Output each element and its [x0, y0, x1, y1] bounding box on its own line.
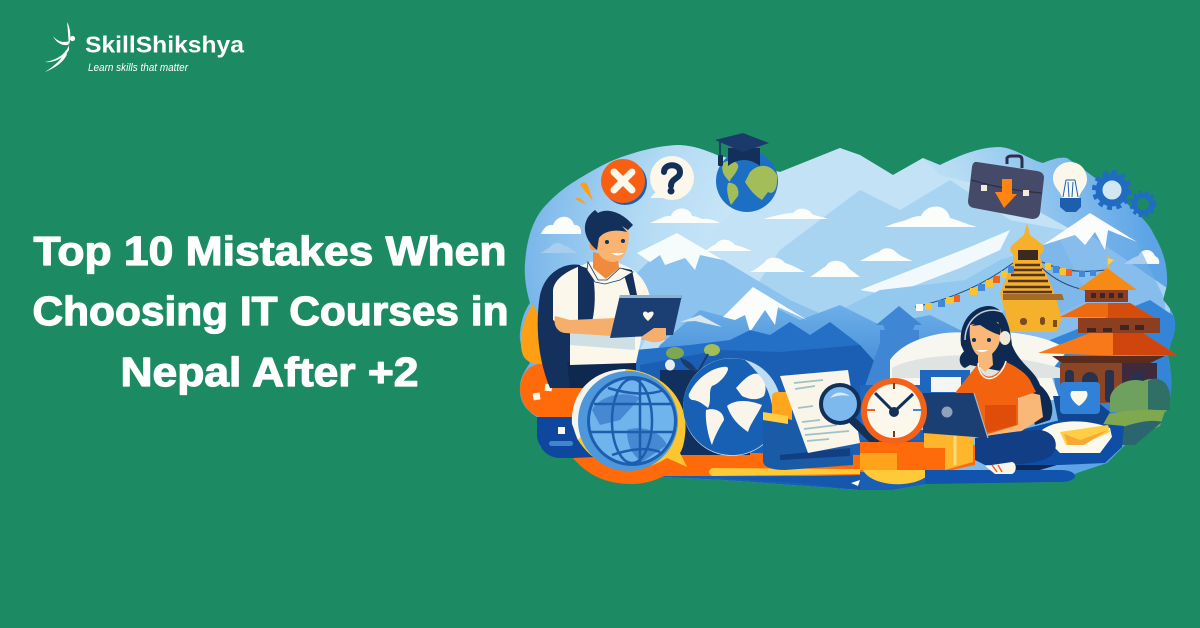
yurt dome — [890, 332, 1068, 400]
dark block behind world globe — [660, 370, 750, 455]
stupa — [1000, 223, 1064, 332]
globe in speech bubble — [572, 369, 687, 471]
headband — [965, 310, 1002, 340]
scenery inside blob — [515, 140, 1185, 495]
paper — [780, 370, 860, 453]
icon: large gear — [1094, 172, 1130, 208]
headphone — [1000, 331, 1010, 345]
hair — [961, 306, 1052, 425]
trousers — [567, 362, 636, 395]
mid mountains — [658, 305, 962, 360]
legs — [975, 430, 1056, 465]
prayer flags — [915, 262, 1105, 311]
folder and document — [763, 370, 875, 470]
title: Nepal After +2 — [120, 349, 418, 395]
orange and yellow boxes — [860, 431, 975, 484]
logo mark: leaping figure — [45, 22, 75, 72]
infographic canvas — [33, 22, 1177, 490]
white cloth and envelope — [1042, 421, 1112, 453]
world globe — [683, 358, 781, 456]
bubble — [573, 369, 687, 469]
ground orange and strips — [573, 452, 860, 484]
icon: globe with graduation cap — [715, 133, 778, 212]
torso shirt — [553, 260, 650, 365]
lower ground base — [661, 430, 927, 490]
logo tagline: Learn skills that matter — [88, 62, 189, 74]
middle roof — [1060, 303, 1155, 318]
pagoda — [1038, 255, 1177, 403]
snow peak: left — [637, 233, 723, 270]
icon: small gear — [1131, 192, 1155, 216]
clouds — [541, 206, 1159, 277]
logo — [45, 22, 244, 74]
icon: briefcase with down arrow — [968, 156, 1044, 219]
right side blue — [1050, 300, 1176, 414]
face — [970, 322, 1001, 358]
blue ground under student — [925, 470, 1075, 484]
illustration — [515, 133, 1185, 495]
icon: red cross badge — [601, 159, 647, 205]
hair — [585, 210, 633, 250]
trees and hill — [1097, 379, 1170, 445]
plant — [665, 344, 720, 372]
logo wordmark: SkillShikshya — [85, 32, 244, 58]
icon: light bulb — [1053, 162, 1087, 212]
neck and collar — [593, 252, 619, 279]
arm — [985, 390, 1043, 436]
navy cloth — [1000, 420, 1124, 465]
bottom roof — [1038, 333, 1177, 356]
laptop — [923, 393, 988, 438]
backpack — [538, 264, 584, 388]
blue box — [537, 417, 600, 458]
title: Top 10 Mistakes When — [34, 228, 506, 274]
walls and doors — [1060, 363, 1157, 403]
arm — [554, 316, 616, 336]
shoe — [985, 462, 1016, 474]
back mountains — [640, 148, 1170, 350]
snow peak: right — [1043, 213, 1137, 250]
shirt — [955, 362, 1036, 435]
backpack straps — [578, 265, 595, 332]
title — [32, 228, 508, 395]
face — [597, 228, 629, 262]
magnifier — [852, 420, 875, 442]
icon: question bubble — [650, 156, 694, 200]
student with laptop — [538, 210, 682, 395]
top roof — [1077, 268, 1137, 290]
distant temple silhouette — [865, 306, 922, 385]
title: Choosing IT Courses in — [32, 288, 508, 334]
laptop — [610, 295, 682, 338]
orange splash — [520, 362, 620, 420]
orange crescent — [521, 304, 565, 365]
folder — [763, 414, 853, 470]
alarm clock — [861, 378, 927, 444]
icon: exclamation marks — [575, 182, 593, 205]
land — [592, 394, 667, 462]
grid — [591, 379, 673, 463]
heart card — [1053, 382, 1110, 430]
snow ridge — [860, 230, 1010, 295]
hand — [641, 328, 666, 342]
seated woman — [923, 306, 1057, 474]
